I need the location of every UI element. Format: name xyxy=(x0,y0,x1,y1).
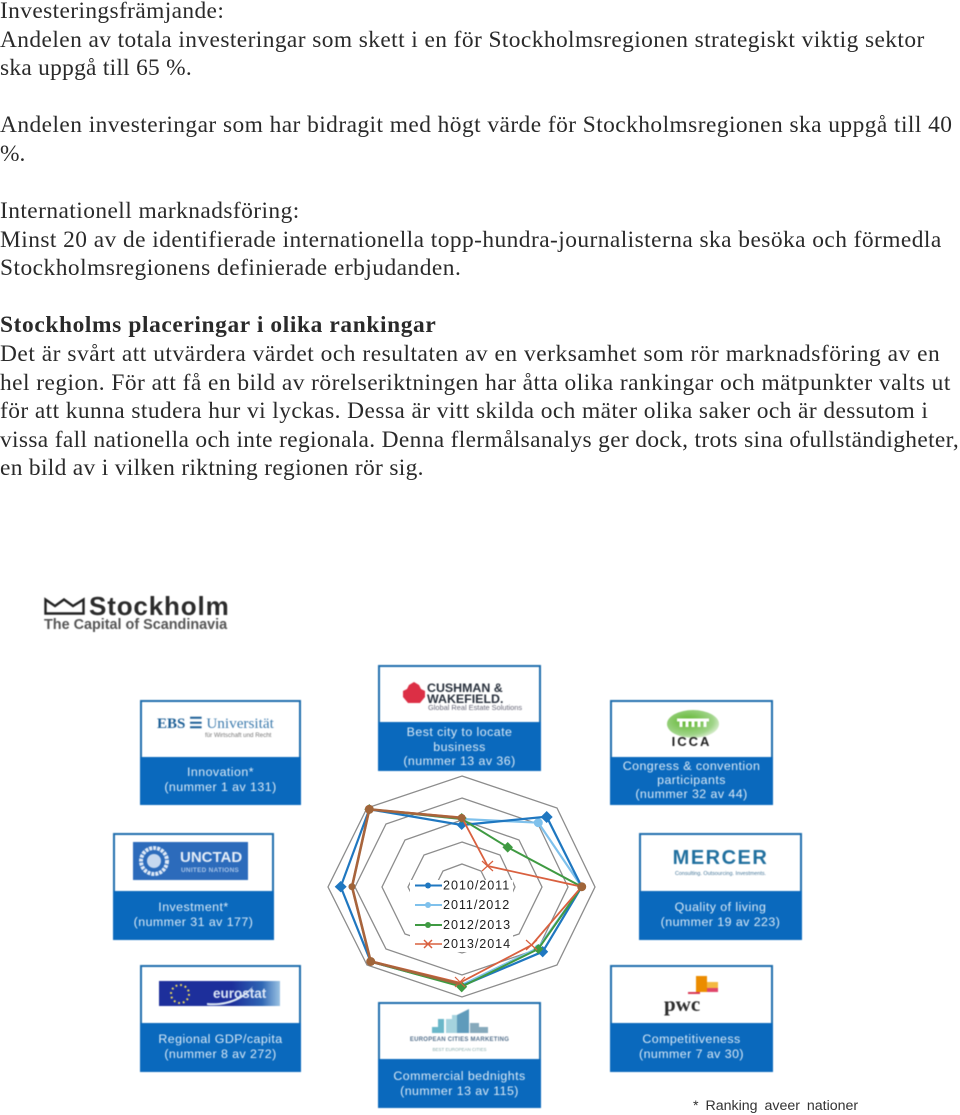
text block: investeringsfrämjande: Andelen av totala investeringar som skett i en för Stockholmsregionen strategiskt viktig sektor xyxy=(0,27,925,53)
card: Mercer quality of living xyxy=(639,833,802,940)
text block: rankings introduction: för att kunna studera hur vi lyckas. Dessa är vitt skilda och mäter olika saker och är dessutom i xyxy=(0,398,928,424)
caption xyxy=(140,757,301,805)
series 2012/2013 xyxy=(352,804,582,992)
logo: Mercer: MERCER xyxy=(673,847,768,869)
logo: European Cities Marketing xyxy=(410,1008,510,1052)
radar chart xyxy=(327,775,596,998)
logo: Eurostat xyxy=(159,981,280,1006)
text block: rankings introduction xyxy=(0,341,959,481)
wordmark: Stockholm xyxy=(89,591,230,621)
logo: Cushman & Wakefield: WAKEFIELD. xyxy=(427,692,503,706)
caption: Quality of living xyxy=(675,900,766,914)
logo: UNCTAD: UNCTAD xyxy=(180,849,242,866)
caption: (nummer 13 av 36) xyxy=(403,754,516,768)
legend: 2011/2012: 2011/2012 xyxy=(443,898,510,912)
caption: Regional GDP/capita xyxy=(158,1032,283,1046)
caption: (nummer 19 av 223) xyxy=(661,915,780,929)
logo: EBS Universität: EBS ☰ Universität xyxy=(157,715,274,732)
series 2013/2014 xyxy=(352,809,582,987)
caption: business xyxy=(433,740,486,754)
caption: (nummer 31 av 177) xyxy=(134,915,253,929)
overlap markers xyxy=(348,805,586,966)
text block: rankings introduction: hel region. För att få en bild av rörelseriktningen har åtta olika rankingar och mätpunkter valts ut xyxy=(0,370,951,396)
text block: internationell marknadsföring: Stockholmsregionens definierade erbjudanden. xyxy=(0,255,461,281)
caption: (nummer 8 av 272) xyxy=(164,1047,277,1061)
logo: EBS Universität: für Wirtschaft und Recht xyxy=(205,732,271,739)
legend: 2010/2011: 2010/2011 xyxy=(443,878,510,892)
text block: rankings introduction: vissa fall nationella och inte regionala. Denna flermålsanalys ger dock, trots sina ofullständigheter, xyxy=(0,427,959,453)
radar grid xyxy=(328,776,595,997)
legend: 2012/2013: 2012/2013 xyxy=(443,918,511,932)
text block: internationell marknadsföring: Minst 20 av de identifierade internationella topp-hundra-journalisterna ska besöka och förmedla xyxy=(0,227,942,253)
caption: (nummer 13 av 115) xyxy=(400,1084,519,1098)
card: Cushman & Wakefield business location xyxy=(378,665,541,771)
caption xyxy=(378,722,541,771)
caption: participants xyxy=(657,773,726,787)
logo: European Cities Marketing: BEST EUROPEAN CITIES xyxy=(433,1047,486,1052)
text block: rankings introduction: en bild av i vilken riktning regionen rör sig. xyxy=(0,455,424,481)
overlapping series stroke xyxy=(352,809,462,984)
caption xyxy=(113,891,274,940)
legend xyxy=(415,878,511,951)
series 2010/2011 xyxy=(335,809,582,986)
card: PwC competitiveness xyxy=(610,965,773,1072)
caption: Competitiveness xyxy=(642,1032,741,1046)
logo: Cushman & Wakefield: Global Real Estate Solutions xyxy=(428,703,522,712)
text block: investeringsfrämjande xyxy=(0,0,952,167)
caption: (nummer 32 av 44) xyxy=(635,787,748,801)
text block: investeringsfrämjande: ska uppgå till 65 %. xyxy=(0,55,192,81)
card: European Cities Marketing commercial bednights xyxy=(378,1002,541,1108)
logo: Stockholm The Capital of Scandinavia xyxy=(43,591,230,633)
text block: internationell marknadsföring: Internationell marknadsföring: xyxy=(0,198,300,224)
icon: crown xyxy=(44,596,86,616)
caption xyxy=(610,1023,773,1072)
logo: UNCTAD xyxy=(133,842,248,880)
caption xyxy=(140,1023,301,1072)
caption: Commercial bednights xyxy=(393,1069,526,1083)
card: Eurostat regional GDP xyxy=(140,965,301,1072)
logo: PwC xyxy=(664,975,719,1016)
card: ICCA congress participants xyxy=(610,700,773,805)
card: UNCTAD investment xyxy=(113,833,274,940)
logo: PwC: pwc xyxy=(664,992,700,1016)
caption xyxy=(378,1059,541,1108)
series 2011/2012 xyxy=(348,809,582,985)
legend backdrop xyxy=(410,880,513,952)
caption xyxy=(639,891,802,940)
caption xyxy=(610,757,773,805)
logo: UNCTAD: UNITED NATIONS xyxy=(181,867,239,874)
logo: Cushman & Wakefield xyxy=(402,681,522,712)
logo: Cushman & Wakefield: CUSHMAN & xyxy=(427,681,503,695)
text block: investeringsfrämjande: Andelen investeringar som har bidragit med högt värde för Stockholmsregionen ska uppgå till 40 xyxy=(0,112,952,138)
caption: (nummer 1 av 131) xyxy=(164,780,277,794)
caption: Best city to locate xyxy=(407,725,512,739)
caption: Investment* xyxy=(158,900,229,914)
tagline: The Capital of Scandinavia xyxy=(44,616,227,632)
logo: ICCA: ICCA xyxy=(672,734,711,749)
card: EBS Universität innovation xyxy=(140,700,301,805)
logo: ICCA xyxy=(666,709,720,749)
caption: Congress & convention xyxy=(623,759,760,773)
text block: internationell marknadsföring xyxy=(0,198,942,281)
logo: Eurostat: eurostat xyxy=(213,986,266,1001)
caption: (nummer 7 av 30) xyxy=(639,1047,744,1061)
text block: rankings introduction: Det är svårt att utvärdera värdet och resultaten av en verksamhet som rör marknadsföring av en xyxy=(0,341,940,367)
footnote: * Ranking aveer nationer xyxy=(693,1098,858,1114)
text block: investeringsfrämjande: %. xyxy=(0,141,25,167)
legend: 2013/2014: 2013/2014 xyxy=(443,937,511,951)
caption: Innovation* xyxy=(187,765,254,779)
logo: Mercer: Consulting. Outsourcing. Investments. xyxy=(675,871,766,877)
heading: Stockholms placeringar: Stockholms placeringar i olika rankingar xyxy=(0,312,436,338)
logo: European Cities Marketing: EUROPEAN CITIES MARKETING xyxy=(410,1037,509,1043)
